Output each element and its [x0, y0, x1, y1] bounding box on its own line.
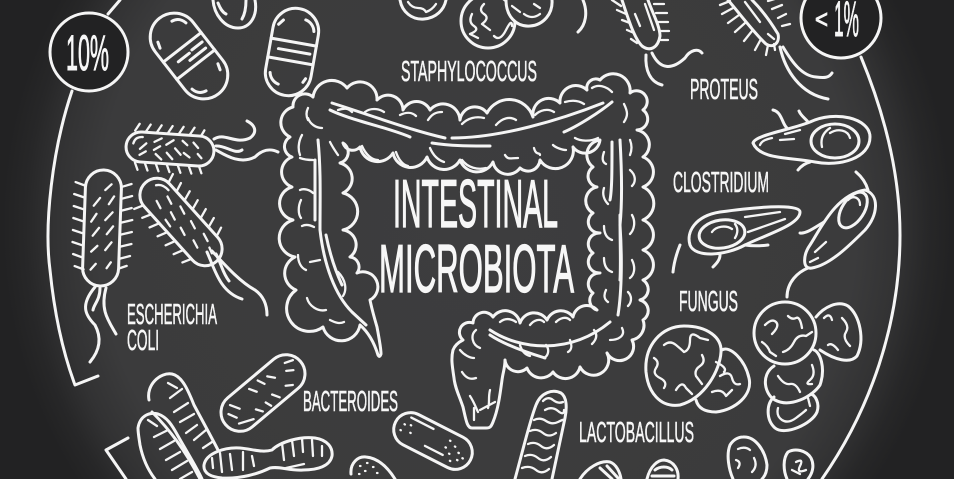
infographic canvas: INTESTINAL	[393, 166, 558, 242]
colon outer outline	[279, 74, 654, 428]
colon haustra marks	[298, 86, 635, 420]
infographic canvas: STAPHYLOCOCCUS	[401, 56, 537, 88]
microbe: staphylococcus cells	[400, 0, 586, 48]
flagella: Escherichia diagonal rod	[207, 251, 267, 315]
microbe: pill cropped at top	[213, 0, 256, 28]
microbe: fungus cluster	[754, 302, 861, 431]
badge: <1%	[801, 0, 881, 58]
flagella: Escherichia vertical rod	[86, 287, 116, 362]
microbe: clostridium middle	[673, 207, 800, 272]
ring frame: left arc	[48, 0, 128, 479]
microbe: Escherichia diagonal rod	[125, 165, 237, 279]
microbe: dumbbell rod	[204, 438, 332, 478]
microbe: dotted rod cropped	[351, 457, 395, 479]
microbe: bacteroides upper rod	[213, 347, 313, 439]
microbe: pill top left	[141, 3, 237, 109]
microbe: clostridium upper	[753, 110, 870, 170]
infographic canvas: BACTEROIDES	[303, 386, 398, 418]
infographic canvas: PROTEUS	[690, 74, 758, 106]
label: Escherichia coli	[127, 299, 217, 357]
microbe: fungus bottom right	[784, 450, 813, 479]
microbe: proteus rod left	[612, 0, 669, 49]
microbe: pill top centre	[262, 5, 322, 99]
infographic canvas: LACTOBACILLUS	[579, 417, 694, 449]
colon inner lines	[330, 102, 612, 146]
infographic canvas: ESCHERICHIA	[127, 299, 217, 331]
microbe: rod bottom centre right	[580, 462, 621, 479]
badge: 10%	[50, 13, 128, 91]
microbe: clostridium right	[787, 172, 876, 297]
label: Escherichia coli: COLI	[127, 325, 159, 357]
microbe: Escherichia horizontal rod	[125, 123, 215, 175]
title: Intestinal Microbiota	[379, 166, 574, 307]
badge: <1%: <	[815, 4, 828, 34]
infographic canvas: FUNGUS	[679, 286, 738, 318]
infographic canvas: CLOSTRIDIUM	[673, 167, 769, 199]
infographic canvas: MICROBIOTA	[379, 231, 574, 307]
microbe: lactobacillus rod	[515, 391, 566, 479]
microbe: fungus bottom left	[728, 437, 767, 479]
microbe: bacteroides dotted rod	[388, 407, 478, 475]
badge: 10%: 10%	[66, 25, 109, 81]
flagella: proteus rod right	[780, 47, 832, 99]
microbe: pill bottom right	[647, 460, 678, 479]
flagella: Escherichia horizontal rod	[214, 121, 278, 160]
colon illustration	[279, 74, 654, 428]
microbe: Escherichia vertical rod	[71, 169, 134, 287]
flagella: proteus rod left	[646, 50, 702, 85]
ring frame: right arc	[822, 57, 900, 479]
microbe: cluster rod front	[138, 413, 202, 479]
microbe: cluster rod back	[149, 374, 218, 479]
microbe: proteus rod right	[720, 0, 790, 55]
microbe: fungus pair	[646, 326, 750, 412]
